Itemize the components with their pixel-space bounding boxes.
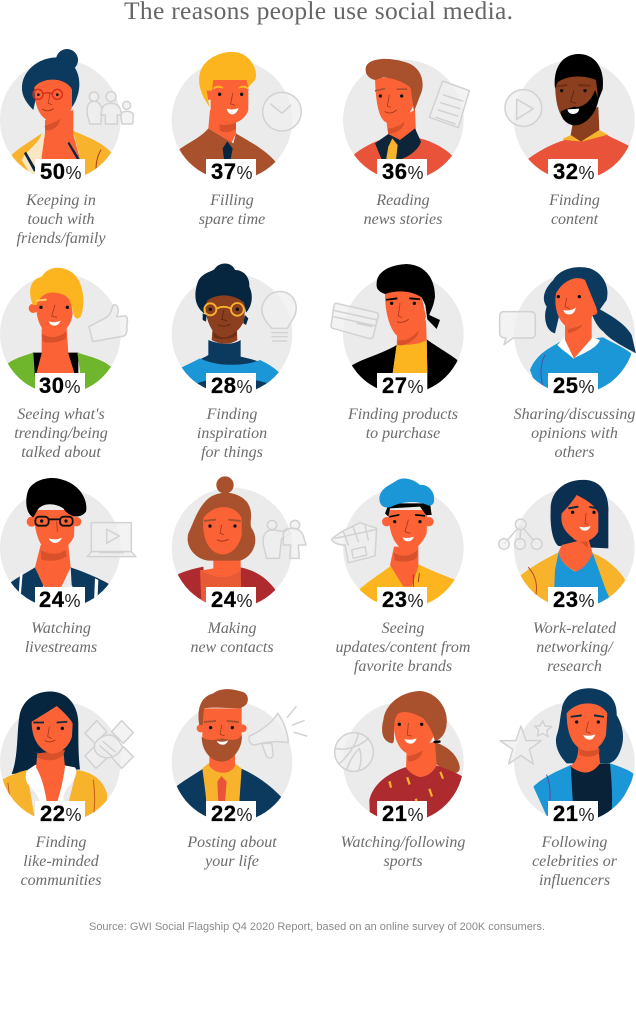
caption: Making: [207, 620, 256, 637]
icon: speech bubble: [500, 312, 535, 345]
panel: seeing updates from favorite brands: [332, 478, 470, 675]
portrait: man with black hair and credit card icon: [331, 264, 464, 395]
caption: talked about: [21, 444, 101, 461]
badge: 21%: 21%: [382, 801, 424, 826]
caption: livestreams: [25, 639, 97, 656]
portrait: woman with red glasses and family icon: [0, 49, 133, 182]
badge: 23%: 23%: [382, 587, 424, 612]
caption: networking/: [536, 639, 614, 656]
portrait: woman with bob hair and network icon: [499, 480, 635, 610]
panel: finding content: [505, 54, 635, 228]
badge: 21%: 21%: [553, 801, 595, 826]
caption: research: [547, 658, 602, 675]
icon: storefront: [332, 523, 377, 563]
caption: news stories: [364, 211, 442, 228]
caption: Watching/following: [341, 834, 465, 851]
panel: finding like-minded communities: [0, 691, 133, 889]
caption: sports: [383, 853, 423, 870]
badge: 23%: 23%: [553, 587, 595, 612]
portrait: man with blond hair and clock icon: [172, 52, 301, 187]
badge: 28%: 28%: [211, 373, 253, 398]
portrait: woman with long dark hair and hands icon: [0, 691, 133, 823]
badge: 32%: 32%: [553, 159, 595, 184]
caption: Seeing what's: [17, 406, 105, 423]
icon: credit card: [331, 303, 378, 339]
badge: 50%: 50%: [40, 159, 82, 184]
portrait: man with black glasses and laptop icon: [0, 478, 136, 610]
badge: 22%: 22%: [40, 801, 82, 826]
caption: Seeing: [382, 620, 424, 637]
caption: Finding: [35, 834, 86, 851]
caption: Following: [541, 834, 607, 851]
caption: Filling: [209, 192, 254, 209]
badge: 22%: 22%: [211, 801, 253, 826]
icon: two people: [263, 520, 306, 558]
caption: favorite brands: [354, 658, 452, 675]
caption: spare time: [199, 211, 265, 228]
caption: touch with: [27, 211, 95, 228]
panel: posting about your life: [172, 689, 307, 870]
panel: work-related networking/research: [499, 480, 635, 675]
portrait: woman with ponytail and basketball icon: [335, 691, 464, 822]
panel: keeping in touch with friends/family: [0, 49, 133, 247]
caption: Finding products: [347, 406, 458, 423]
panel: following celebrities or influencers: [500, 688, 635, 889]
source note: Source: GWI Social Flagship Q4 2020 Report, based on an online survey of 200K consumers.: [89, 921, 545, 933]
panel: finding inspiration: [172, 264, 296, 461]
panel: watching/following sports: [335, 691, 465, 870]
icon: network nodes: [499, 519, 542, 549]
caption: celebrities or: [532, 853, 618, 870]
caption: for things: [201, 444, 263, 461]
caption: Work-related: [533, 620, 617, 637]
icon: laptop with play: [87, 523, 136, 557]
caption: new contacts: [190, 639, 274, 656]
badge: 37%: 37%: [211, 159, 253, 184]
panel: seeing what's trending: [0, 268, 127, 461]
portrait: man with brown hair and document icon: [343, 59, 469, 183]
caption: Sharing/discussing: [514, 406, 635, 423]
badge: 24%: 24%: [39, 587, 81, 612]
caption: influencers: [539, 872, 610, 889]
portrait: woman with curly hair, yellow glasses and bulb icon: [172, 264, 296, 395]
icon: basketball: [335, 733, 373, 771]
caption: Finding: [206, 406, 257, 423]
panel: sharing/discussing opinions: [500, 267, 636, 461]
badge: 27%: 27%: [382, 373, 424, 398]
caption: Posting about: [186, 834, 277, 851]
icon: thumbs up: [89, 305, 127, 342]
icon: megaphone: [249, 707, 307, 758]
portrait: bearded man and play icon: [505, 54, 635, 187]
caption: friends/family: [17, 230, 106, 247]
caption: others: [554, 444, 594, 461]
badge: 36%: 36%: [382, 159, 424, 184]
caption: to purchase: [366, 425, 440, 442]
caption: updates/content from: [336, 639, 470, 656]
caption: communities: [21, 872, 101, 889]
icon: light bulb: [262, 291, 296, 341]
caption: trending/being: [14, 425, 108, 442]
icon: clock: [263, 92, 301, 131]
icon: document: [429, 81, 469, 128]
icon: play button: [505, 90, 542, 126]
panel: finding products to purchase: [331, 264, 464, 442]
panel: reading news stories: [343, 59, 469, 228]
badge: 25%: 25%: [553, 373, 595, 398]
panel: making new contacts: [172, 476, 306, 656]
icon: stars: [500, 721, 552, 764]
portrait: bearded man in blazer and megaphone icon: [172, 689, 307, 823]
caption: Reading: [375, 192, 430, 209]
badge: 30%: 30%: [39, 373, 81, 398]
panel: filling spare time: [172, 52, 301, 228]
caption: opinions with: [531, 425, 618, 442]
portrait: woman with long navy hair and speech bubble icon: [500, 267, 636, 397]
portrait: woman with wavy navy hair and stars icon: [500, 688, 635, 823]
caption: Keeping in: [25, 192, 96, 209]
caption: inspiration: [197, 425, 267, 442]
icon: joined hands: [85, 721, 133, 768]
icon: family: [87, 92, 133, 124]
portrait: man with blue hair and storefront icon: [332, 478, 464, 610]
caption: Finding: [548, 192, 600, 209]
caption: Watching: [31, 620, 91, 637]
badge: 24%: 24%: [211, 587, 253, 612]
panel: watching livestreams: [0, 478, 136, 656]
caption: your life: [203, 853, 259, 870]
portrait: woman with bun and contacts icon: [172, 476, 306, 610]
portrait: blond woman in green and thumbs-up icon: [0, 268, 127, 394]
caption: like-minded: [23, 853, 100, 870]
caption: content: [551, 211, 599, 228]
